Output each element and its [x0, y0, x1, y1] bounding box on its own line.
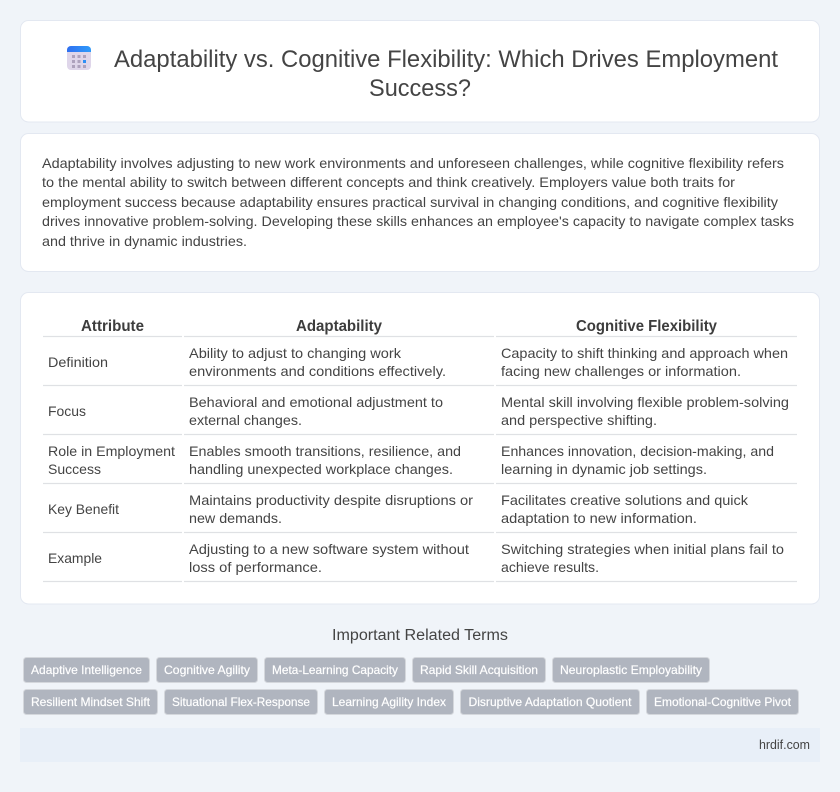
tag: Adaptive Intelligence: Adaptive Intelligence [31, 663, 142, 677]
tag: Learning Agility Index [324, 690, 454, 714]
row: key benefit: new demands. [189, 510, 282, 526]
text block: intro: and thrive in dynamic industries. [42, 233, 247, 249]
title [114, 46, 778, 102]
row: role in employment success: Enables smooth transitions, resilience, and [189, 443, 461, 459]
table header: Adaptability [296, 318, 382, 335]
row: focus: and perspective shifting. [501, 412, 657, 428]
panel: intro paragraph [20, 134, 820, 272]
text block: intro: to the mental ability to switch between different concepts and think creatively. Employers value both traits for [42, 174, 735, 190]
text block: intro: Adaptability involves adjusting to new work environments and unforeseen challenges, while cognitive flexibility refers [42, 155, 784, 171]
footer [20, 728, 820, 762]
row: example: loss of performance. [189, 559, 322, 575]
text block: intro: drives innovative problem-solving. Developing these skills enhances an employee's capacity to navigate complex tasks [42, 213, 794, 229]
row: definition: Definition [48, 354, 108, 370]
row: focus: external changes. [189, 412, 302, 428]
row: definition: environments and conditions effectively. [189, 363, 446, 379]
row: role in employment success: Role in Employment [48, 443, 175, 459]
related term tags [24, 658, 798, 714]
title: Success? [369, 75, 471, 102]
row: definition [48, 345, 788, 379]
tag: Adaptive Intelligence [24, 658, 150, 682]
row: focus [48, 394, 789, 428]
icon: calendar [67, 46, 91, 70]
tag: Rapid Skill Acquisition [412, 658, 546, 682]
row: example [48, 541, 784, 575]
title: Adaptability vs. Cognitive Flexibility: Which Drives Employment [114, 46, 778, 73]
tag: Emotional-Cognitive Pivot: Emotional-Cognitive Pivot [654, 695, 792, 709]
row: definition: Ability to adjust to changing work [189, 345, 402, 361]
text block: intro [42, 155, 794, 249]
table header: Cognitive Flexibility [576, 318, 717, 335]
tag: Resilient Mindset Shift [24, 690, 158, 714]
row: focus: Focus [48, 403, 86, 419]
tag: Meta-Learning Capacity: Meta-Learning Capacity [272, 663, 398, 677]
tag: Disruptive Adaptation Quotient [460, 690, 640, 714]
heading: important related terms: Important Related Terms [332, 627, 508, 644]
row: role in employment success: Enhances innovation, decision-making, and [501, 443, 774, 459]
tag: Emotional-Cognitive Pivot [646, 690, 798, 714]
tag: Situational Flex-Response: Situational Flex-Response [172, 695, 310, 709]
row: example: Adjusting to a new software system without [189, 541, 469, 557]
row: key benefit: Maintains productivity despite disruptions or [189, 492, 473, 508]
tag: Meta-Learning Capacity [264, 658, 406, 682]
row: example: Switching strategies when initial plans fail to [501, 541, 784, 557]
tag: Disruptive Adaptation Quotient: Disruptive Adaptation Quotient [468, 695, 632, 709]
tag: Cognitive Agility: Cognitive Agility [164, 663, 250, 677]
row: role in employment success: Success [48, 461, 101, 477]
row: role in employment success: handling unexpected workplace changes. [189, 461, 453, 477]
tag: Neuroplastic Employability: Neuroplastic Employability [560, 663, 702, 677]
panel: title card [20, 20, 820, 122]
row: focus: Mental skill involving flexible problem-solving [501, 394, 789, 410]
tag: Rapid Skill Acquisition: Rapid Skill Acquisition [420, 663, 538, 677]
row: definition: Capacity to shift thinking and approach when [501, 345, 788, 361]
table header [81, 318, 717, 335]
tag: Cognitive Agility [156, 658, 258, 682]
footer: hrdif.com [759, 738, 810, 752]
tag: Situational Flex-Response [164, 690, 318, 714]
row: role in employment success [48, 443, 774, 477]
tag: Resilient Mindset Shift: Resilient Mindset Shift [31, 695, 151, 709]
table header: Attribute [81, 318, 144, 335]
panel: comparison table [20, 292, 820, 604]
row: example: Example [48, 550, 102, 566]
row: example: achieve results. [501, 559, 599, 575]
row: key benefit: adaptation to new information. [501, 510, 697, 526]
row: key benefit: Facilitates creative solutions and quick [501, 492, 749, 508]
row: definition: facing new challenges or information. [501, 363, 741, 379]
row: role in employment success: learning in dynamic job settings. [501, 461, 707, 477]
text block: intro: employment success because adaptability ensures practical survival in changing conditions, and cognitive flexibility [42, 194, 778, 210]
row: focus: Behavioral and emotional adjustment to [189, 394, 443, 410]
row: key benefit [48, 492, 749, 526]
row: key benefit: Key Benefit [48, 501, 119, 517]
tag: Neuroplastic Employability [552, 658, 710, 682]
tag: Learning Agility Index: Learning Agility Index [332, 695, 446, 709]
